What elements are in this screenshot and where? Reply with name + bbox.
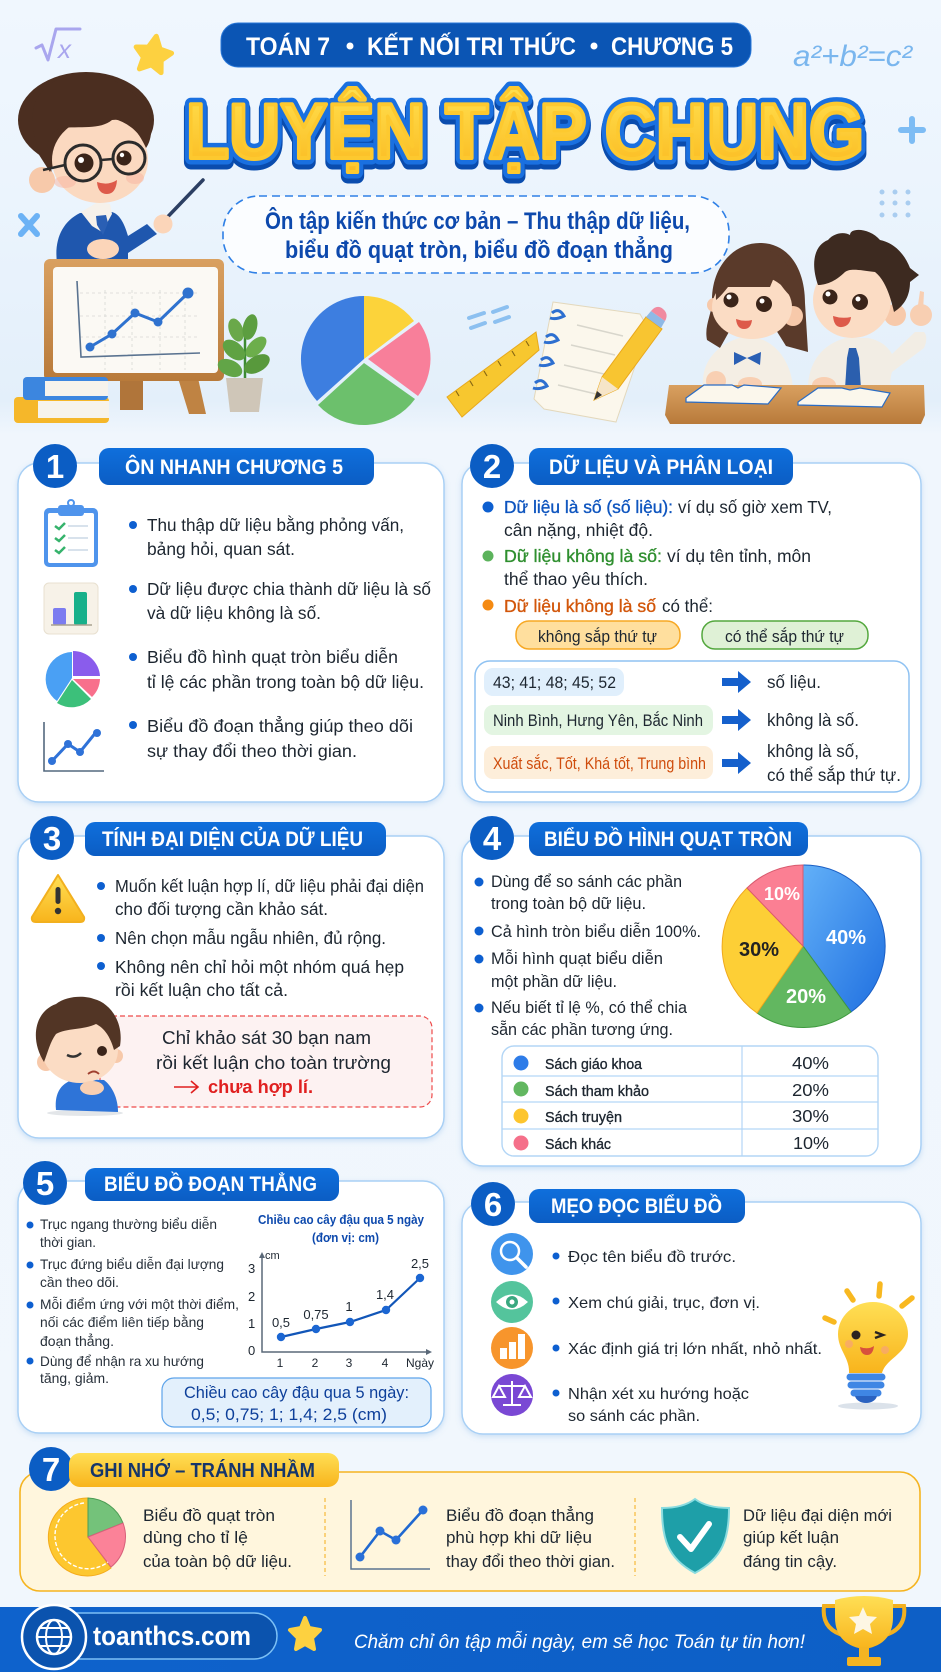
line chart: (đơn vị: cm) xyxy=(312,1230,379,1245)
text: bullets: một phần dữ liệu. xyxy=(491,973,617,991)
text: bullets: Nên chọn mẫu ngẫu nhiên, đủ rộng. xyxy=(115,927,386,948)
text 3: Dữ liệu đại diện mới xyxy=(743,1507,892,1525)
text: bullets: Biểu đồ đoạn thẳng giúp theo dõi xyxy=(147,715,413,736)
line chart: 2,5 xyxy=(411,1256,429,1271)
legend table: Sách tham khảo xyxy=(545,1084,649,1100)
top pill: TOÁN 7 xyxy=(246,32,330,61)
icon: warning xyxy=(32,875,84,922)
slogan: Chăm chỉ ôn tập mỗi ngày, em sẽ học Toán tự tin hơn! xyxy=(354,1632,806,1653)
tag: not ordered xyxy=(516,621,680,649)
heading 5: BIỂU ĐỒ ĐOẠN THẲNG xyxy=(104,1172,317,1196)
line chart: cm xyxy=(265,1250,280,1262)
text: bullets: Xác định giá trị lớn nhất, nhỏ nhất. xyxy=(568,1341,822,1358)
text: bullets: Dùng để nhận ra xu hướng xyxy=(40,1353,204,1369)
illustration: ruler xyxy=(447,332,539,417)
text: bullets: Dữ liệu được chia thành dữ liệu là số xyxy=(147,579,431,599)
text: bullets: Xem chú giải, trục, đơn vị. xyxy=(568,1295,760,1312)
icon: clipboard xyxy=(44,500,98,567)
callout: rồi kết luận cho toàn trường xyxy=(156,1053,391,1073)
text: bullets: Mỗi hình quạt biểu diễn xyxy=(491,949,663,968)
panel 4: pie chart xyxy=(462,816,921,1166)
badge 2 xyxy=(470,444,514,488)
text 2: thay đổi theo thời gian. xyxy=(446,1553,615,1571)
text: bullets xyxy=(474,873,701,1039)
callout: chưa hợp lí. xyxy=(208,1077,313,1097)
icon: bars xyxy=(44,583,98,634)
text: bullets: tỉ lệ các phần trong toàn bộ dữ liệu. xyxy=(147,672,424,692)
icon: magnifier xyxy=(491,1233,533,1275)
line chart: 2 xyxy=(312,1356,319,1370)
heading 2: DỮ LIỆU VÀ PHÂN LOẠI xyxy=(549,455,773,479)
legend table: 40% xyxy=(792,1053,829,1073)
footer xyxy=(0,1596,941,1672)
pie chart: 30% xyxy=(739,939,779,961)
examples box: 43; 41; 48; 45; 52 xyxy=(493,674,616,692)
arrows xyxy=(722,671,751,774)
legend table: 30% xyxy=(792,1106,829,1126)
illustration: boy student xyxy=(808,230,932,393)
icon: bars xyxy=(491,1327,533,1369)
text 1: dùng cho tỉ lệ xyxy=(143,1529,248,1547)
examples box: số liệu. xyxy=(767,672,821,692)
illustration: girl student xyxy=(702,243,808,391)
text: bullets: Trục ngang thường biểu diễn xyxy=(40,1216,217,1232)
text: definitions: Dữ liệu không là số: xyxy=(504,546,662,566)
text: bullets: và dữ liệu không là số. xyxy=(147,603,321,623)
line chart: 4 xyxy=(382,1356,389,1370)
text: bullets: cho đối tượng cần khảo sát. xyxy=(115,899,328,919)
data note: 0,5; 0,75; 1; 1,4; 2,5 (cm) xyxy=(191,1405,387,1424)
subtitle: biểu đồ quạt tròn, biểu đồ đoạn thẳng xyxy=(285,235,673,264)
badge 7: 7 xyxy=(42,1451,60,1488)
illustration: teacher boy xyxy=(18,72,203,263)
badge 4: 4 xyxy=(483,820,502,857)
badge 3: 3 xyxy=(43,820,61,857)
badge 5: 5 xyxy=(36,1165,54,1202)
text 3: đáng tin cậy. xyxy=(743,1553,837,1571)
icon: small pie xyxy=(46,651,100,707)
text: bullets: Trục đứng biểu diễn đại lượng xyxy=(40,1256,224,1272)
text: bullets: Muốn kết luận hợp lí, dữ liệu phải đại diện xyxy=(115,876,424,896)
website pill xyxy=(22,1605,277,1669)
heading 4: BIỂU ĐỒ HÌNH QUẠT TRÒN xyxy=(544,827,792,851)
pie chart: 40% xyxy=(826,927,866,949)
text: bullets: Dùng để so sánh các phần xyxy=(491,873,682,891)
illustration: big pie chart xyxy=(301,296,431,425)
text 1: Biểu đồ quạt tròn xyxy=(143,1507,275,1525)
line chart: 0 xyxy=(248,1343,255,1358)
legend table: Sách khác xyxy=(545,1137,611,1153)
heading 3 xyxy=(85,822,386,856)
badge 2: 2 xyxy=(483,448,501,485)
line chart: 1 xyxy=(248,1316,255,1331)
text 3 xyxy=(743,1507,892,1571)
header illustration: math symbols: a²+b²=c² xyxy=(793,40,913,73)
text: bullets: rồi kết luận cho tất cả. xyxy=(115,980,288,1000)
title: LUYỆN TẬP CHUNG xyxy=(186,87,864,175)
callout: Chỉ khảo sát 30 bạn nam xyxy=(162,1028,371,1048)
heading 7 xyxy=(69,1453,339,1487)
heading 4 xyxy=(529,822,808,856)
title: LUYỆN TẬP CHUNG xyxy=(186,91,864,179)
text: bullets: trong toàn bộ dữ liệu. xyxy=(491,895,646,913)
text: bullets xyxy=(26,1216,239,1386)
illustration: plant xyxy=(215,313,273,412)
examples box xyxy=(475,661,909,792)
icon: scales xyxy=(491,1374,533,1416)
line chart xyxy=(248,1212,434,1370)
examples box: Xuất sắc, Tốt, Khá tốt, Trung bình xyxy=(493,754,706,773)
heading 3: TÍNH ĐẠI DIỆN CỦA DỮ LIỆU xyxy=(102,827,363,851)
line chart: 1 xyxy=(345,1299,353,1314)
heading 5 xyxy=(85,1168,339,1201)
text: bullets: Cả hình tròn biểu diễn 100%. xyxy=(491,922,701,941)
examples box: có thể sắp thứ tự. xyxy=(767,764,901,785)
text: bullets: so sánh các phần. xyxy=(568,1408,700,1425)
text: definitions xyxy=(482,497,832,616)
text: bullets: Nhận xét xu hướng hoặc xyxy=(568,1386,749,1403)
legend table: 20% xyxy=(792,1080,829,1100)
pie chart: 20% xyxy=(786,986,826,1008)
examples box: không là số, xyxy=(767,741,859,761)
text: definitions: cân nặng, nhiệt độ. xyxy=(504,520,653,540)
panel 7: remember xyxy=(20,1447,920,1591)
line chart: 2 xyxy=(248,1289,255,1304)
text: bullets: cần theo dõi. xyxy=(40,1274,119,1290)
examples box: không là số. xyxy=(767,710,859,730)
text 3: giúp kết luận xyxy=(743,1529,839,1547)
text: bullets: Đọc tên biểu đồ trước. xyxy=(568,1248,736,1266)
icon: pie xyxy=(48,1498,125,1576)
text: bullets: tăng, giảm. xyxy=(40,1370,109,1386)
line chart: Chiều cao cây đậu qua 5 ngày xyxy=(258,1212,425,1227)
text: definitions: thể thao yêu thích. xyxy=(504,569,648,589)
pie chart: 10% xyxy=(764,884,800,904)
text 2: Biểu đồ đoạn thẳng xyxy=(446,1506,594,1525)
badge 6: 6 xyxy=(484,1186,502,1223)
text: bullets xyxy=(97,876,424,1000)
text: definitions: ví dụ số giờ xem TV, xyxy=(678,497,832,517)
subtitle: Ôn tập kiến thức cơ bản – Thu thập dữ liệu, xyxy=(265,207,690,235)
text: bullets: sự thay đổi theo thời gian. xyxy=(147,741,357,761)
heading 7: GHI NHỚ – TRÁNH NHẦM xyxy=(90,1458,315,1482)
website pill: toanthcs.com xyxy=(93,1621,251,1651)
text: bullets: Biểu đồ hình quạt tròn biểu diễn xyxy=(147,646,398,667)
text: definitions: Dữ liệu là số (số liệu): xyxy=(504,497,673,517)
data note xyxy=(162,1378,431,1427)
icon: shield xyxy=(662,1499,729,1573)
tag: ordered: có thể sắp thứ tự xyxy=(725,627,844,646)
icon: trophy xyxy=(824,1596,904,1666)
line chart: 1 xyxy=(277,1356,284,1370)
legend table: 10% xyxy=(793,1133,829,1153)
header illustration: math symbols: x xyxy=(56,34,72,64)
panel 6: chart reading tips xyxy=(462,1182,921,1434)
badge 7 xyxy=(29,1447,73,1491)
illustration: notebook and pencil xyxy=(533,302,667,422)
badge 4 xyxy=(470,816,514,860)
heading 6 xyxy=(529,1189,745,1223)
icon: eye xyxy=(491,1281,533,1323)
heading 1 xyxy=(99,448,374,485)
text 1: của toàn bộ dữ liệu. xyxy=(143,1553,292,1571)
tag: ordered xyxy=(702,621,868,649)
text: definitions: ví dụ tên tỉnh, môn xyxy=(667,546,811,566)
text: bullets: Không nên chỉ hỏi một nhóm quá hẹp xyxy=(115,957,404,977)
text: definitions: có thể: xyxy=(662,596,713,616)
tag: not ordered: không sắp thứ tự xyxy=(538,627,657,646)
icon: line chart xyxy=(44,722,104,771)
data note: Chiều cao cây đậu qua 5 ngày: xyxy=(184,1383,409,1402)
panel 3: representativeness xyxy=(18,816,444,1138)
title: LUYỆN TẬP CHUNG xyxy=(186,87,864,175)
top pill: CHƯƠNG 5 xyxy=(611,33,733,61)
top pill xyxy=(221,23,751,67)
line chart: 1,4 xyxy=(376,1287,394,1302)
examples box: Ninh Bình, Hưng Yên, Bắc Ninh xyxy=(493,711,703,730)
line chart: 3 xyxy=(346,1356,353,1370)
text: bullets: Mỗi điểm ứng với một thời điểm, xyxy=(40,1296,239,1312)
illustration: desk with books xyxy=(665,385,925,424)
line chart: 0,5 xyxy=(272,1315,290,1330)
heading 1: ÔN NHANH CHƯƠNG 5 xyxy=(125,455,343,479)
panel 2: data types xyxy=(462,444,921,802)
badge 6 xyxy=(471,1182,515,1226)
legend table: Sách truyện xyxy=(545,1110,622,1126)
callout xyxy=(100,1016,432,1107)
text: bullets: đoạn thẳng. xyxy=(40,1332,114,1349)
text: bullets: nối các điểm liên tiếp bằng xyxy=(40,1314,204,1330)
line chart: Ngày xyxy=(406,1356,434,1370)
icon: star xyxy=(290,1618,320,1649)
illustration: books xyxy=(14,377,109,423)
pie chart xyxy=(722,865,885,1028)
line chart: 3 xyxy=(248,1261,255,1276)
subtitle xyxy=(223,196,729,273)
panel 5: line chart xyxy=(18,1161,444,1433)
top pill: KẾT NỐI TRI THỨC xyxy=(367,31,576,61)
heading 2 xyxy=(529,448,793,485)
legend table xyxy=(502,1046,878,1156)
text 2: phù hợp khi dữ liệu xyxy=(446,1529,592,1547)
icon: gold star xyxy=(132,33,174,74)
heading 6: MẸO ĐỌC BIỂU ĐỒ xyxy=(551,1194,722,1218)
text: bullets: sẵn các phần tương ứng. xyxy=(491,1020,673,1039)
text: bullets: bảng hỏi, quan sát. xyxy=(147,539,295,559)
text: bullets: Thu thập dữ liệu bằng phỏng vấn, xyxy=(147,514,404,535)
illustration: light bulb xyxy=(825,1284,912,1410)
illustration: thinking boy xyxy=(36,997,123,1116)
text: definitions: Dữ liệu không là số xyxy=(504,596,656,616)
line chart: 0,75 xyxy=(303,1307,329,1322)
badge 1 xyxy=(33,444,77,488)
icon: line chart xyxy=(351,1500,430,1569)
badge 3 xyxy=(30,816,74,860)
text: bullets xyxy=(552,1248,822,1425)
panel 1: review xyxy=(18,444,444,802)
legend table: Sách giáo khoa xyxy=(545,1057,643,1073)
text: bullets: Nếu biết tỉ lệ %, có thể chia xyxy=(491,999,688,1017)
text: bullets xyxy=(129,514,431,761)
badge 5 xyxy=(23,1161,67,1205)
badge 1: 1 xyxy=(46,448,64,485)
text: bullets: thời gian. xyxy=(40,1234,96,1250)
text 1 xyxy=(143,1507,292,1571)
text 2 xyxy=(446,1506,615,1571)
header illustration: math symbols xyxy=(21,29,923,328)
illustration: board with line chart xyxy=(44,259,224,414)
